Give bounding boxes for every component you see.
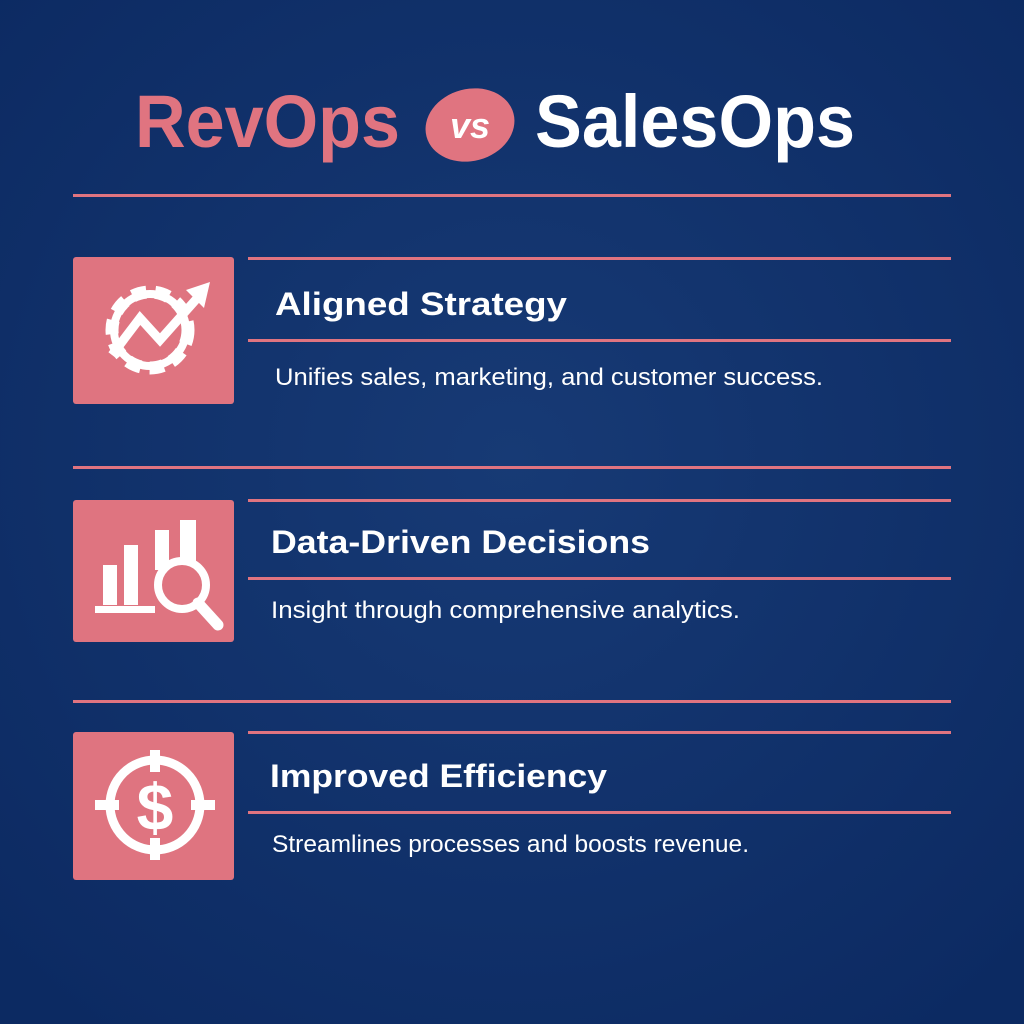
title: RevOps — [135, 80, 400, 163]
heading: Data-Driven Decisions — [271, 524, 650, 560]
heading: Aligned Strategy — [275, 286, 567, 322]
vs badge — [417, 79, 523, 171]
description: Unifies sales, marketing, and customer success. — [275, 364, 823, 391]
panel: aligned strategy — [73, 257, 951, 404]
vs badge: vs — [450, 105, 490, 146]
title — [135, 79, 855, 171]
panel: data-driven decisions — [73, 499, 951, 642]
description: Insight through comprehensive analytics. — [271, 597, 740, 624]
icon: dollar target — [73, 732, 234, 880]
icon: bar chart with magnifier — [73, 500, 234, 642]
panel: improved efficiency — [73, 731, 951, 880]
icon: dollar target: $ — [137, 770, 173, 844]
title: SalesOps — [535, 80, 855, 163]
description: Streamlines processes and boosts revenue. — [272, 831, 749, 858]
icon: gear with trend arrow — [73, 257, 234, 404]
heading: Improved Efficiency — [270, 758, 607, 794]
